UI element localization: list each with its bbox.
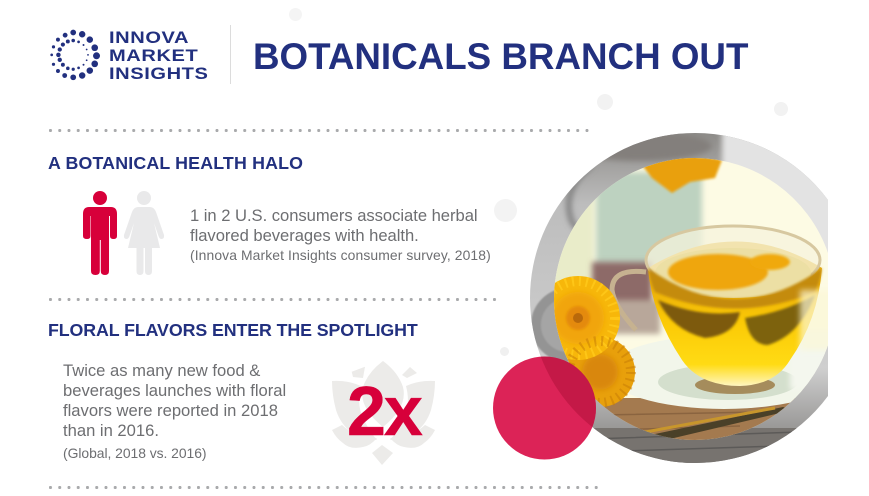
photo: colour inner circle — [554, 158, 828, 440]
text: floral launches statistic: Twice as many new food & — [63, 361, 260, 380]
text: consumer statistic: 1 in 2 U.S. consumers associate herbal — [190, 206, 478, 225]
icon: lotus with 2x — [332, 361, 435, 465]
heading: floral flavors: FLORAL FLAVORS ENTER THE SPOTLIGHT — [48, 320, 418, 340]
photo: greyscale outer ring — [530, 133, 828, 463]
photo: red overlay circle — [493, 356, 596, 460]
text: consumer statistic: flavored beverages with health. — [190, 226, 419, 245]
text: floral launches statistic — [63, 361, 286, 461]
icon: woman — [124, 191, 164, 275]
photo: cup — [612, 271, 646, 330]
logo wordmark — [109, 28, 208, 83]
logo wordmark: INSIGHTS — [109, 64, 208, 83]
icon: man and woman figures — [83, 191, 164, 275]
logo wordmark: MARKET — [109, 46, 198, 65]
title: BOTANICALS BRANCH OUT — [253, 36, 748, 77]
2x figure: 2x — [347, 372, 421, 450]
icon: lotus — [332, 361, 435, 465]
text: floral launches statistic: (Global, 2018 vs. 2016) — [63, 445, 206, 461]
icon: man — [83, 191, 117, 275]
photo: dandelions — [565, 337, 635, 407]
photo: tea cup with dandelions in circular frame — [493, 133, 828, 463]
logo mark: dotted ring — [50, 30, 100, 80]
logo wordmark: INNOVA — [109, 28, 189, 47]
text: floral launches statistic: than in 2016. — [63, 421, 159, 440]
logo — [50, 28, 208, 83]
heading: a botanical health halo: A BOTANICAL HEALTH HALO — [48, 153, 303, 173]
text: consumer statistic — [190, 206, 491, 263]
text: consumer statistic: (Innova Market Insights consumer survey, 2018) — [190, 247, 491, 263]
photo: table and saucer — [595, 398, 795, 440]
text: floral launches statistic: beverages launches with floral — [63, 381, 286, 400]
text: floral launches statistic: flavors were reported in 2018 — [63, 401, 278, 420]
